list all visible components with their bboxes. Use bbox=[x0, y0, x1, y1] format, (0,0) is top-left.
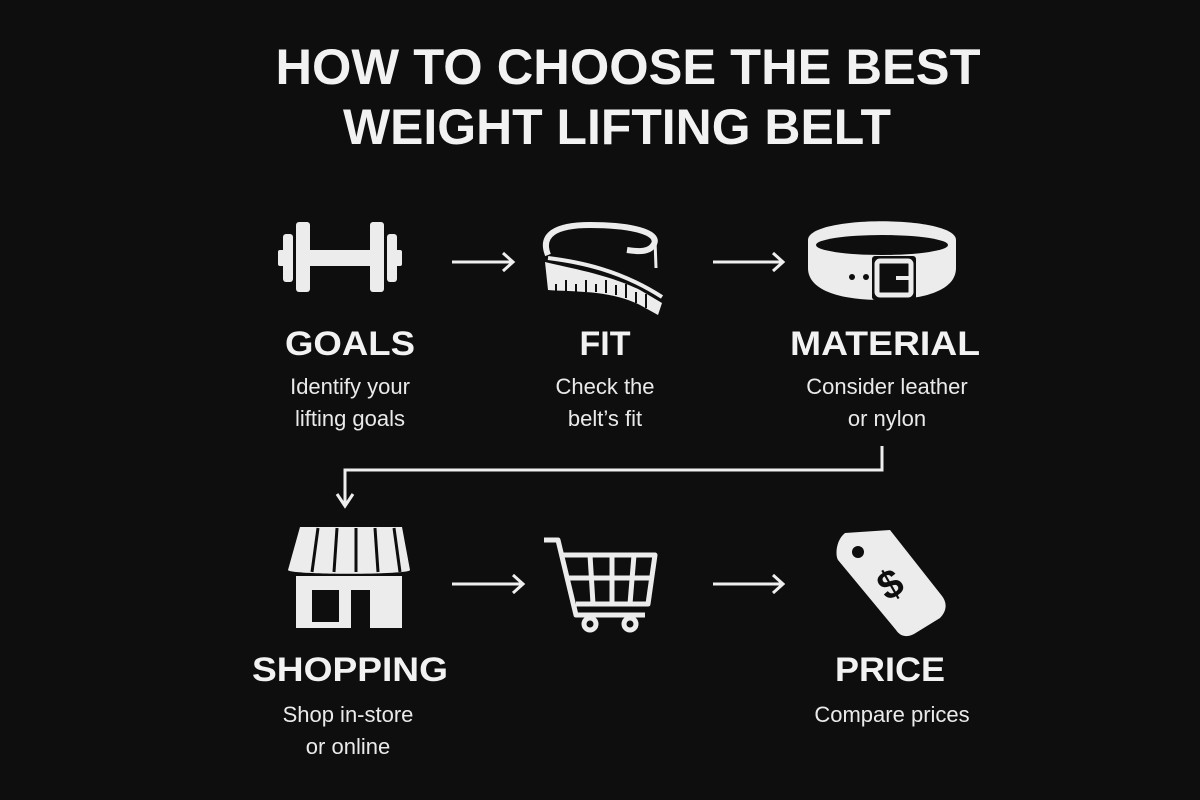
text: goals: lifting goals bbox=[295, 406, 405, 431]
arrow 1 bbox=[452, 253, 513, 271]
heading: fit: FIT bbox=[580, 325, 631, 363]
heading: shopping: SHOPPING bbox=[252, 651, 448, 689]
text: material: or nylon bbox=[848, 406, 926, 431]
step: shopping bbox=[252, 527, 448, 759]
icon: dumbbell bbox=[278, 222, 402, 292]
title: HOW TO CHOOSE THE BEST bbox=[276, 39, 980, 95]
arrow 4 bbox=[713, 575, 783, 593]
step: material bbox=[790, 221, 980, 431]
arrow 2 bbox=[713, 253, 783, 271]
heading: price: PRICE bbox=[835, 651, 945, 689]
step: goals bbox=[278, 222, 415, 431]
connector arrow bbox=[337, 446, 882, 506]
text: goals: Identify your bbox=[290, 374, 410, 399]
text: price: Compare prices bbox=[814, 702, 970, 727]
arrow 3 bbox=[452, 575, 523, 593]
heading: material: MATERIAL bbox=[790, 325, 980, 363]
title: WEIGHT LIFTING BELT bbox=[343, 99, 891, 155]
text: fit: Check the bbox=[555, 374, 655, 399]
text: shopping: Shop in-store bbox=[283, 702, 413, 727]
step: fit bbox=[545, 225, 662, 431]
text: shopping: or online bbox=[306, 734, 390, 759]
text: material: Consider leather bbox=[806, 374, 968, 399]
icon: measuring tape bbox=[545, 225, 662, 315]
icon: store bbox=[288, 527, 410, 628]
icon: price tag bbox=[836, 530, 946, 636]
icon: price tag: $ bbox=[870, 560, 911, 609]
step: price bbox=[814, 530, 970, 727]
heading: goals: GOALS bbox=[285, 325, 415, 363]
text: fit: belt’s fit bbox=[568, 406, 642, 431]
icon: cart bbox=[544, 540, 655, 630]
title bbox=[276, 39, 980, 155]
icon: belt bbox=[808, 221, 956, 300]
